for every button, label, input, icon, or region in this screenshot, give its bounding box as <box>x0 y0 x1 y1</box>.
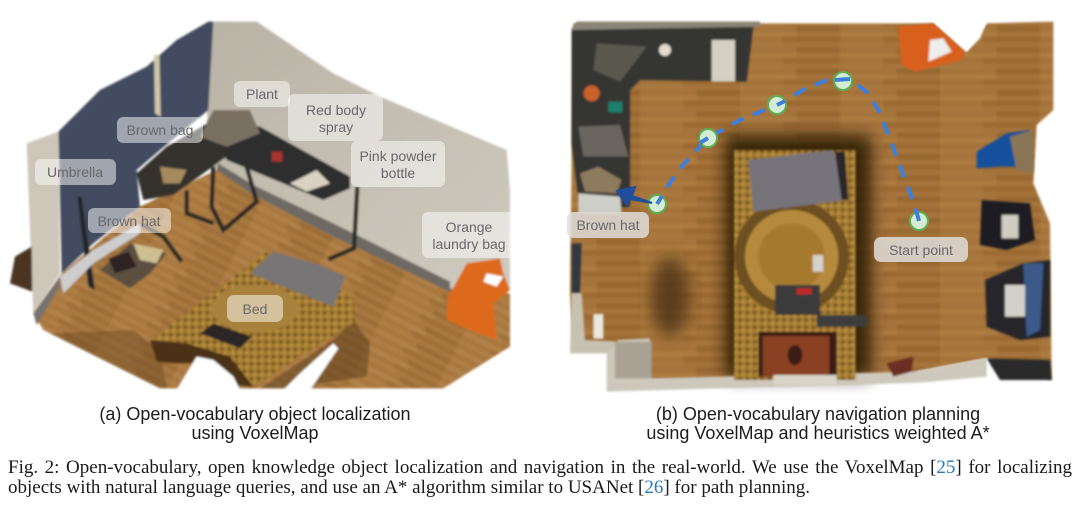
blue wall <box>58 22 213 273</box>
bed shadow on floor <box>260 320 370 388</box>
label: Pink powder bottle: bottle <box>381 165 415 181</box>
grey blanket <box>748 150 847 212</box>
label: Brown bag: Brown bag <box>127 122 193 138</box>
label: Pink powder bottle: Pink powder <box>359 148 437 164</box>
white torn bottom edge <box>177 357 240 390</box>
waypoint: start <box>910 212 928 230</box>
label: Red body spray: spray <box>319 119 353 135</box>
bed <box>150 252 355 387</box>
panel: top-down navigation map <box>567 22 1053 392</box>
left wall strip <box>27 132 60 313</box>
debris blob <box>10 247 32 292</box>
left-wall shadow <box>572 243 582 293</box>
waypoint 4 <box>699 129 717 147</box>
subcaption a <box>99 404 411 443</box>
wall skirting <box>217 163 450 292</box>
white corner cutout <box>935 22 987 52</box>
figure caption: Fig. 2: Open-vocabulary, open knowledge object localization and navigation in the real-world. We use the VoxelMap [25] for localizing <box>8 457 1072 478</box>
waypoint 2 <box>834 72 852 90</box>
label: Orange laundry bag: laundry bag <box>432 236 506 252</box>
mirror / pole <box>154 55 161 117</box>
rug <box>758 332 837 377</box>
right desk top <box>207 120 350 200</box>
left desk top <box>137 120 227 200</box>
subcaption b: (b) Open-vocabulary navigation planning <box>656 404 980 424</box>
label: Red body spray <box>288 94 383 141</box>
waypoint 3 <box>768 96 786 114</box>
object on bed <box>775 285 820 315</box>
floor shadow <box>50 330 167 388</box>
label: Start point: Start point <box>889 242 953 258</box>
label: Brown bag <box>117 117 203 143</box>
right wall <box>207 22 510 290</box>
floor <box>33 167 510 388</box>
figure caption: objects with natural language queries, and use an A* algorithm similar to USANet [26] for path planning. <box>8 476 810 498</box>
waypoint: goal <box>648 195 666 213</box>
dashed path <box>657 79 919 221</box>
label: Brown hat: Brown hat <box>97 213 161 229</box>
label: Red body spray: Red body <box>306 102 366 118</box>
right-side objects <box>977 130 1033 168</box>
label: Brown hat <box>567 212 649 238</box>
label: Bed <box>227 295 283 322</box>
path with waypoints <box>617 72 928 230</box>
label: Bed: Bed <box>243 301 267 317</box>
short segments over nodes <box>657 79 919 221</box>
label: Start point <box>874 237 968 262</box>
bed <box>734 150 856 380</box>
bottom wall over bed <box>773 375 837 385</box>
subcaption a: using VoxelMap <box>191 423 319 443</box>
label: Umbrella: Umbrella <box>47 164 103 180</box>
umbrella <box>77 197 95 290</box>
room scene <box>10 22 510 390</box>
desk legs <box>140 167 357 262</box>
top-left desk <box>572 27 753 213</box>
label: Brown hat <box>88 208 171 233</box>
subcaption b: using VoxelMap and heuristics weighted A* <box>646 423 990 443</box>
object labels <box>35 81 517 322</box>
label: Pink powder bottle <box>351 141 445 187</box>
map scene <box>570 22 1053 392</box>
label: Plant: Plant <box>246 86 278 102</box>
label: Brown hat: Brown hat <box>576 217 640 233</box>
bottom walls <box>570 293 617 353</box>
radiator and clutter <box>60 223 140 293</box>
wood floor <box>570 22 1053 380</box>
orange laundry bag <box>898 23 965 72</box>
panel: 3D room view with object localization <box>10 22 517 390</box>
arrow to brown hat <box>617 187 652 205</box>
floor shadow <box>650 257 690 337</box>
label: Plant <box>234 81 290 107</box>
bed shadow <box>725 135 872 378</box>
figure caption <box>8 457 1072 498</box>
label: Orange laundry bag <box>422 212 517 258</box>
orange bag <box>447 258 510 340</box>
subcaption a: (a) Open-vocabulary object localization <box>99 404 411 424</box>
label: Orange laundry bag: Orange <box>446 219 493 235</box>
label: Umbrella <box>35 159 116 185</box>
subcaption b <box>646 404 990 443</box>
